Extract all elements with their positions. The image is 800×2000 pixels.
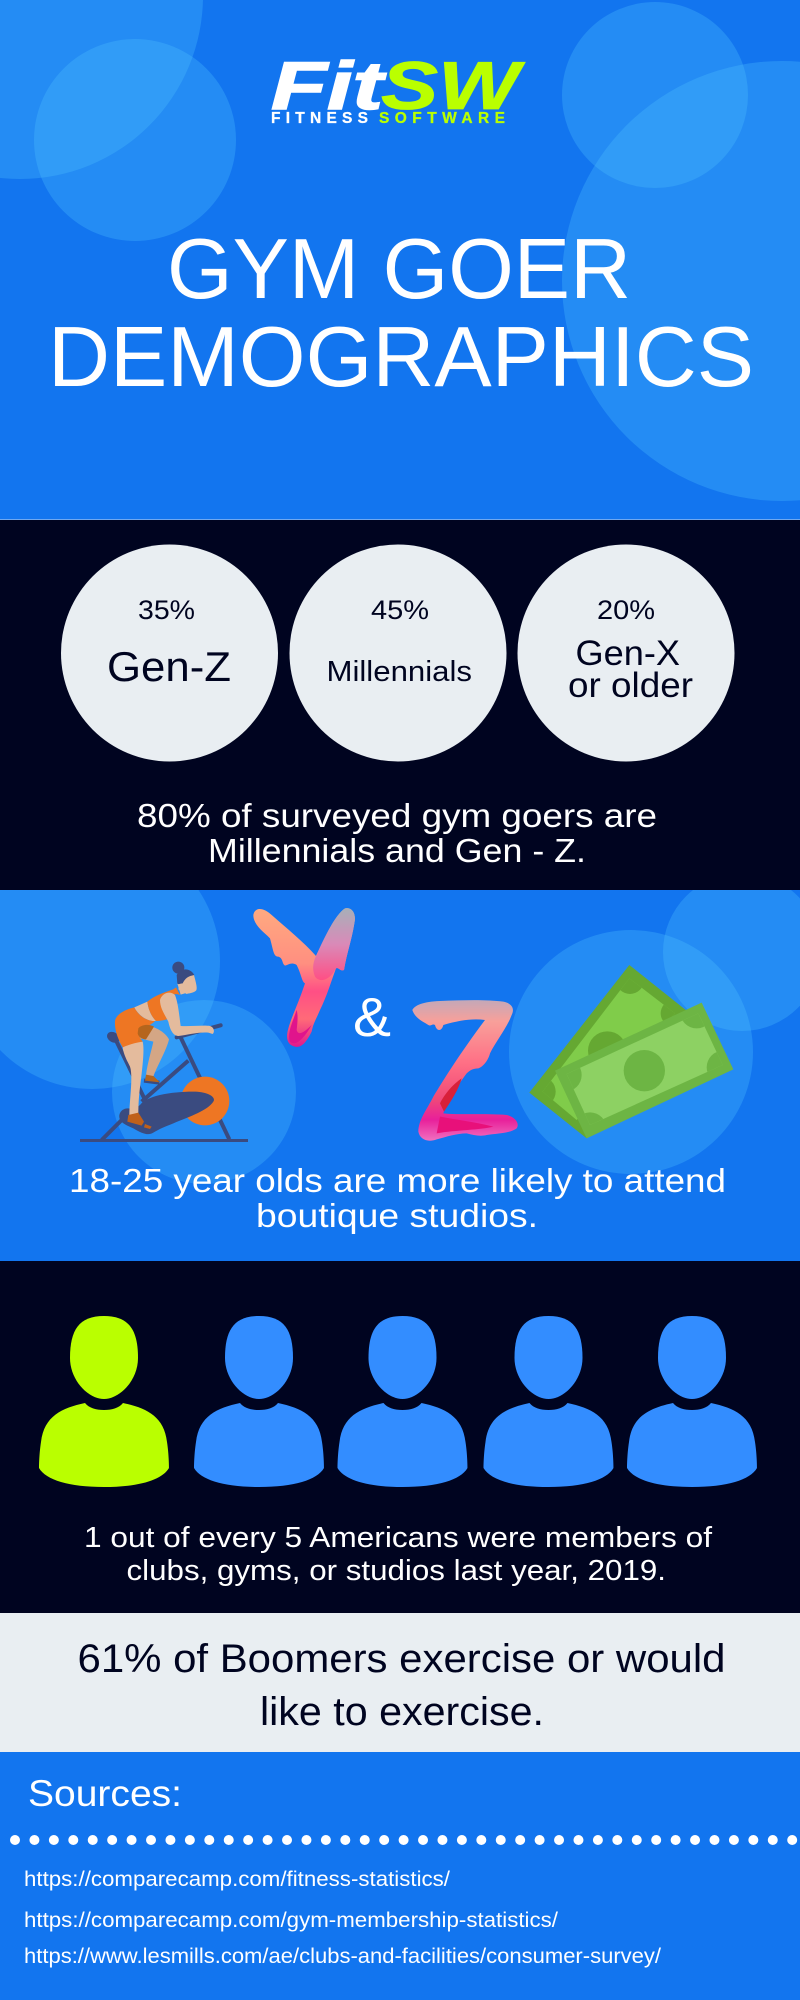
panel: 1 in 5 members xyxy=(0,1261,800,1613)
text: source links: https://www.lesmills.com/ae/clubs-and-facilities/consumer-survey/ xyxy=(24,1945,661,1968)
text: members statement: clubs, gyms, or studios last year, 2019. xyxy=(126,1555,666,1587)
circle: Gen-Z 35% xyxy=(61,544,278,762)
panel: sources xyxy=(0,1752,800,2000)
panel: hero xyxy=(0,0,800,520)
text: source links: https://comparecamp.com/fitness-statistics/ xyxy=(24,1868,450,1891)
title: GYM GOER xyxy=(167,222,631,317)
text: source links xyxy=(24,1868,661,1968)
text: 80% statement: Millennials and Gen - Z. xyxy=(208,832,586,869)
icon: person 5 xyxy=(627,1316,757,1487)
panel: generation breakdown xyxy=(0,520,800,890)
circle: Millennials 45%: 45% xyxy=(371,595,429,625)
panel: Boomers statement xyxy=(0,1613,800,1752)
text: 80% statement xyxy=(137,797,657,869)
panel: Boomers statement: 61% of Boomers exercise or would xyxy=(78,1637,726,1681)
circle: Gen-X or older 20%: Gen-X xyxy=(576,634,680,673)
icon: person 4 xyxy=(484,1316,614,1487)
title: DEMOGRAPHICS xyxy=(48,310,754,405)
circle: Gen-X or older 20%: 20% xyxy=(597,595,655,625)
circle: Gen-X or older 20% xyxy=(518,544,734,762)
icon: letter Z xyxy=(412,1000,518,1141)
title xyxy=(48,222,754,405)
text: source links: https://comparecamp.com/gym-membership-statistics/ xyxy=(24,1909,558,1932)
text: boutique studios statement: boutique studios. xyxy=(256,1197,538,1234)
panel: Boomers statement: like to exercise. xyxy=(260,1690,544,1734)
icon: highlighted person xyxy=(39,1316,169,1487)
logo: Fit xyxy=(271,48,386,124)
logo: SW xyxy=(381,48,526,124)
icon: person 2 xyxy=(194,1316,324,1487)
circle: Millennials 45%: Millennials xyxy=(326,656,472,688)
text: boutique studios statement xyxy=(69,1162,726,1234)
circle: Gen-Z 35%: Gen-Z xyxy=(107,643,231,690)
icon: woman on exercise bike xyxy=(80,962,248,1142)
circle: Millennials 45% xyxy=(290,544,506,762)
heading: sources: Sources: xyxy=(28,1773,182,1814)
logo: FITNESS xyxy=(271,110,368,127)
panel: Y and Z xyxy=(0,890,800,1234)
icon: person 3 xyxy=(338,1316,468,1487)
icon: letter Y xyxy=(253,908,355,1047)
text: ampersand: & xyxy=(353,986,391,1048)
text: boutique studios statement: 18-25 year olds are more likely to attend xyxy=(69,1162,726,1199)
text: members statement: 1 out of every 5 Americans were members of xyxy=(84,1522,713,1554)
icon: money bills xyxy=(526,965,740,1146)
circle: Gen-Z 35%: 35% xyxy=(138,595,195,625)
circle: Gen-X or older 20%: or older xyxy=(568,666,693,705)
text: 80% statement: 80% of surveyed gym goers are xyxy=(137,797,657,834)
logo: SOFTWARE xyxy=(379,110,505,127)
logo xyxy=(271,48,526,127)
text: members statement xyxy=(84,1522,713,1587)
